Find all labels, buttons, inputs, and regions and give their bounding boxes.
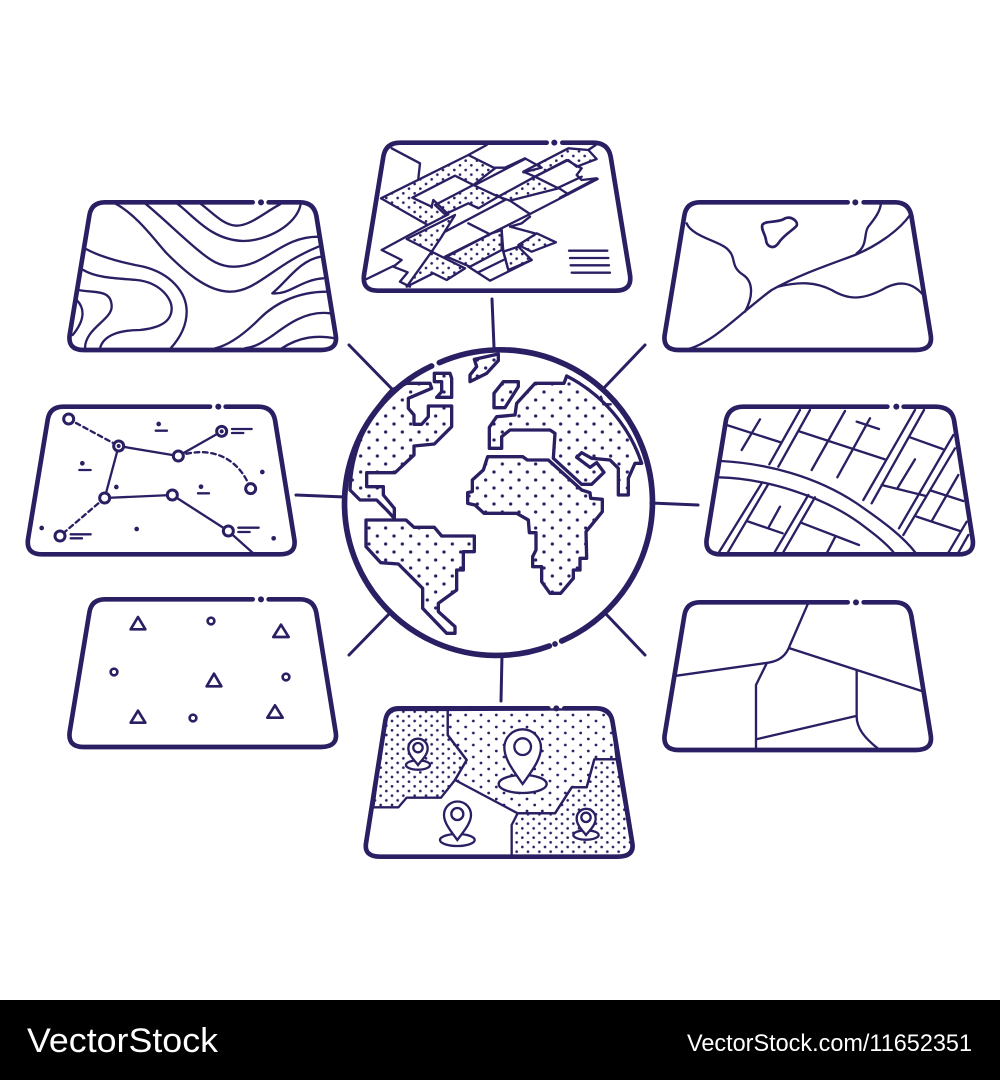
small coastal cut bbox=[601, 397, 611, 404]
panel: scattered markers bbox=[69, 596, 336, 747]
continent: eurasia bbox=[489, 376, 642, 495]
frame dot bbox=[215, 404, 221, 410]
panel: rivers and lake bbox=[664, 199, 931, 350]
continent: south america bbox=[366, 520, 474, 633]
footer brand: VectorStock bbox=[27, 1022, 219, 1060]
panel: contour map bbox=[69, 199, 336, 350]
footer id: VectorStock.com/11652351 bbox=[687, 1030, 972, 1057]
legend lines bbox=[569, 251, 610, 273]
panel frame bbox=[28, 407, 295, 554]
panel: parcels map bbox=[364, 140, 630, 291]
small labels bbox=[71, 429, 259, 538]
panel frame bbox=[664, 202, 931, 350]
panel: street grid bbox=[706, 404, 973, 554]
frame dot bbox=[852, 199, 858, 205]
connector lines bbox=[296, 299, 698, 701]
dotted parcels bbox=[381, 148, 597, 287]
pin: large bbox=[499, 729, 547, 793]
continent: africa bbox=[468, 457, 602, 593]
streets bbox=[718, 410, 968, 553]
pin: top left bbox=[406, 739, 430, 770]
frame dot bbox=[553, 705, 559, 711]
panel frame bbox=[364, 143, 630, 291]
frame dot bbox=[258, 199, 264, 205]
pin: right bbox=[573, 809, 599, 840]
contour lines bbox=[73, 203, 335, 348]
network lines bbox=[60, 419, 253, 553]
dotted regions bbox=[373, 709, 632, 856]
panel: road network bbox=[664, 599, 931, 750]
panel frame bbox=[706, 407, 973, 554]
rivers bbox=[687, 203, 923, 349]
lake bbox=[762, 218, 797, 247]
frame dot bbox=[893, 404, 899, 410]
parcel boundaries bbox=[367, 145, 598, 287]
panel: location pins bbox=[366, 705, 633, 857]
globe bbox=[345, 350, 652, 655]
island: britain bbox=[494, 382, 518, 408]
scattered points bbox=[39, 422, 276, 541]
roads bbox=[677, 604, 922, 748]
panel frame bbox=[69, 599, 336, 747]
network nodes bbox=[55, 414, 256, 541]
panel frame bbox=[69, 202, 336, 350]
frame dot bbox=[551, 140, 557, 146]
panel frame bbox=[664, 602, 931, 750]
continent: north america bbox=[350, 383, 452, 518]
globe outline bbox=[345, 350, 652, 655]
frame dot bbox=[853, 599, 859, 605]
circle markers bbox=[111, 618, 289, 721]
frame dot bbox=[258, 596, 264, 602]
pin: bottom bbox=[440, 801, 475, 846]
island: iceland bbox=[470, 354, 498, 382]
footer bar bbox=[0, 1000, 1000, 1080]
panel: constellation network bbox=[28, 404, 295, 554]
triangle markers bbox=[131, 617, 289, 723]
panel frame bbox=[366, 708, 633, 857]
island: greenland bbox=[434, 373, 452, 397]
